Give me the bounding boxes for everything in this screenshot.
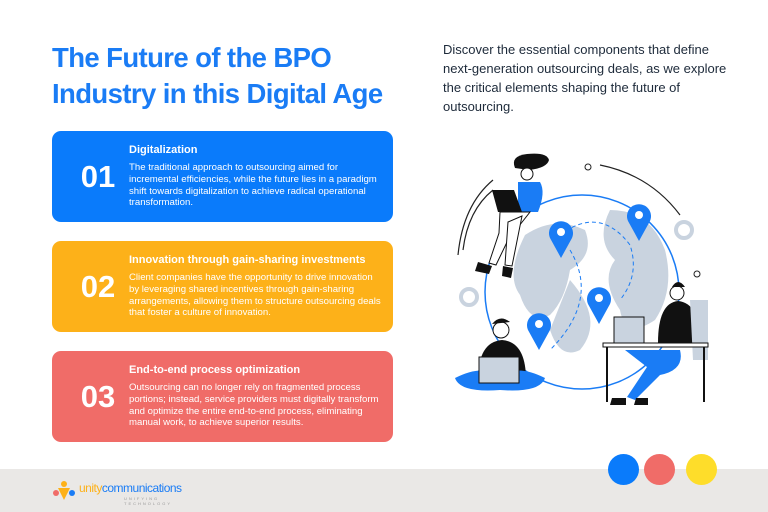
panel: optimization [52,351,393,442]
decorative dots [608,454,639,485]
logo [53,481,182,506]
figure: man cross-legged [455,318,545,390]
intro text: Discover the essential components that define next-generation outsourcing deals, as we explore the critical elements shaping the future of outsourcing. [443,42,726,114]
figure: woman on globe [475,154,549,278]
panel: digitalization: Digitalization [129,144,197,156]
panel: innovation [52,241,393,332]
panel: optimization: End-to-end process optimization [129,364,300,376]
footer bar [0,469,768,512]
title: The Future of the BPO [52,42,331,73]
figure: man at desk [603,282,708,405]
panel: innovation: 02 [81,268,115,304]
icon: location pins [527,204,651,350]
title [52,42,383,109]
panel: optimization: Outsourcing can no longer rely on fragmented process portions; instead, service providers must digitally transform and optimize the entire end-to-end process, eliminating manual work, to achieve superior results. [129,382,379,428]
logo: unitycommunications [79,481,182,495]
panel: innovation: Innovation through gain-sharing investments [129,254,366,266]
panel: digitalization: 01 [81,158,115,194]
title: Industry in this Digital Age [52,78,383,109]
panel: digitalization: The traditional approach to outsourcing aimed for incremental efficiencies, while the future lies in a paradigm shift towards digitalization to achieve radical operational transformation. [129,162,377,208]
logo: UNIFYING TECHNOLOGY [124,496,172,506]
panel: innovation: Client companies have the opportunity to drive innovation by leveraging shared incentives through gain-sharing arrangements, allowing them to structure outsourcing deals that foster a culture of innovation. [129,272,381,318]
panel: digitalization [52,131,393,222]
panel: optimization: 03 [81,378,115,414]
